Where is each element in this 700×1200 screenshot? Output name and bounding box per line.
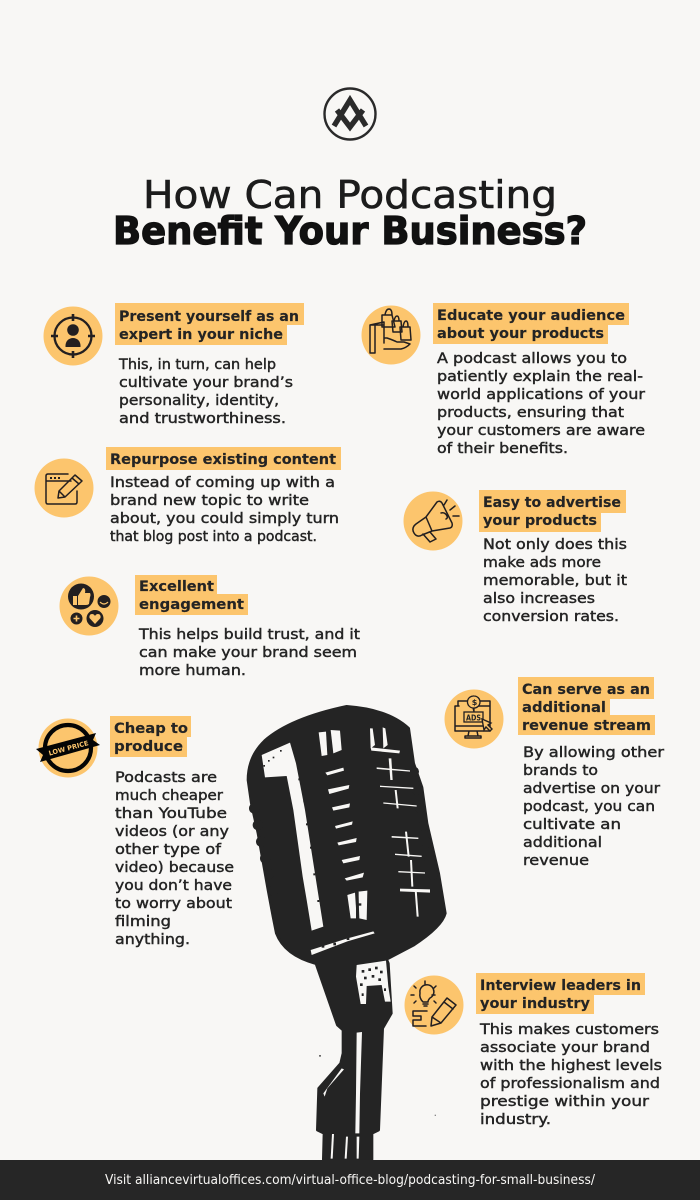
heading highlight (135, 575, 248, 615)
body text: This makes customers (479, 1022, 659, 1038)
body text: A podcast allows you to (437, 351, 627, 367)
icon: hand with shopping bags (362, 306, 420, 364)
icon: megaphone (404, 492, 462, 550)
heading highlight (110, 716, 191, 757)
body text (523, 745, 664, 869)
body text: of professionalism and (480, 1076, 660, 1092)
body text: world applications of your (437, 387, 645, 403)
body text: you don’t have (115, 878, 232, 894)
icon: low price badge: LOW PRICE (48, 739, 90, 758)
title (113, 173, 587, 253)
body text (115, 770, 234, 948)
logo (324, 88, 376, 140)
body text: advertise on your (523, 781, 660, 797)
body text: of their benefits. (437, 441, 568, 457)
body text: This, in turn, can help (118, 357, 276, 373)
heading highlight (106, 447, 341, 470)
icon: browser window with pencil (34, 458, 94, 518)
body text: videos (or any (115, 824, 229, 840)
body text: more human. (139, 663, 246, 679)
heading highlight: about your products (437, 326, 604, 342)
heading highlight: Interview leaders in (480, 978, 641, 994)
footer bar: Visit alliancevirtualoffices.com/virtual-office-blog/podcasting-for-small-business/ (105, 1173, 596, 1188)
body text: associate your brand (480, 1040, 650, 1056)
body text: also increases (483, 591, 595, 607)
icon: monitor with ads: ADS (466, 714, 481, 722)
body text: with the highest levels (480, 1058, 662, 1074)
heading highlight (518, 677, 655, 735)
body text: cultivate an (523, 817, 621, 833)
body text: brands to (523, 763, 598, 779)
title: How Can Podcasting (143, 173, 557, 217)
body text: than YouTube (115, 806, 227, 822)
heading highlight (479, 490, 626, 532)
body text: and trustworthiness. (119, 411, 286, 427)
body text: conversion rates. (483, 609, 619, 625)
body text: to worry about (115, 896, 233, 912)
body text: podcast, you can (523, 799, 655, 815)
panel: educate your audience (362, 303, 645, 457)
body text: prestige within your (480, 1094, 649, 1110)
heading highlight: Present yourself as an (119, 309, 299, 325)
body text: products, ensuring that (437, 405, 625, 421)
panel: interview leaders (404, 973, 662, 1128)
heading highlight: Can serve as an (522, 682, 650, 698)
heading highlight: Repurpose existing content (110, 452, 336, 468)
body text: filming (115, 914, 171, 930)
body text: Instead of coming up with a (110, 475, 335, 491)
body text: brand new topic to write (110, 493, 309, 509)
body text: This helps build trust, and it (138, 627, 361, 643)
heading highlight: additional (522, 700, 606, 716)
icon: target with person (44, 306, 102, 366)
body text: memorable, but it (483, 573, 628, 589)
body text: personality, identity, (119, 393, 279, 409)
body text: anything. (115, 932, 190, 948)
body text: Podcasts are (115, 770, 217, 786)
body text: cultivate your brand’s (119, 375, 293, 391)
icon: light bulb and pencil (404, 976, 464, 1034)
body text (110, 475, 339, 545)
body text (483, 537, 628, 625)
body text: additional (523, 835, 602, 851)
body text: can make your brand seem (139, 645, 357, 661)
heading highlight: expert in your niche (119, 327, 283, 343)
heading highlight: revenue stream (522, 718, 651, 734)
icon: low price badge (36, 718, 100, 778)
body text: your customers are aware (437, 423, 645, 439)
body text: revenue (523, 853, 589, 869)
icon: monitor with ads (444, 690, 504, 748)
heading highlight (115, 303, 304, 345)
heading highlight: Easy to advertise (483, 495, 621, 511)
body text (479, 1022, 662, 1128)
heading highlight: your industry (480, 996, 591, 1012)
body text: that blog post into a podcast. (110, 529, 317, 545)
body text (437, 351, 645, 457)
footer bar (0, 1160, 700, 1200)
panel: easy to advertise (404, 490, 628, 625)
panel: present yourself as an expert (44, 303, 304, 427)
body text: other type of (115, 842, 222, 858)
heading highlight: Educate your audience (437, 308, 625, 324)
heading highlight: Excellent (139, 579, 214, 595)
panel: repurpose existing content (34, 447, 341, 545)
body text: much cheaper (115, 788, 223, 804)
body text: patiently explain the real- (437, 369, 643, 385)
microphone illustration (248, 706, 445, 1159)
body text: Not only does this (483, 537, 627, 553)
body text (118, 357, 293, 427)
heading highlight: Cheap to (114, 721, 188, 737)
body text: By allowing other (523, 745, 664, 761)
title: Benefit Your Business? (113, 209, 587, 253)
panel: cheap to produce (36, 716, 234, 948)
heading highlight: your products (483, 513, 597, 529)
body text: industry. (480, 1112, 551, 1128)
heading highlight (433, 303, 629, 344)
panel: additional revenue stream (444, 677, 664, 869)
icon: monitor with ads: $ (472, 698, 478, 707)
heading highlight: engagement (139, 597, 244, 613)
body text: about, you could simply turn (110, 511, 339, 527)
icon: social reactions (60, 576, 118, 636)
heading highlight (476, 973, 645, 1014)
panel: excellent engagement (60, 575, 361, 679)
body text: make ads more (483, 555, 601, 571)
body text (138, 627, 361, 679)
heading highlight: produce (114, 739, 183, 755)
body text: video) because (115, 860, 234, 876)
